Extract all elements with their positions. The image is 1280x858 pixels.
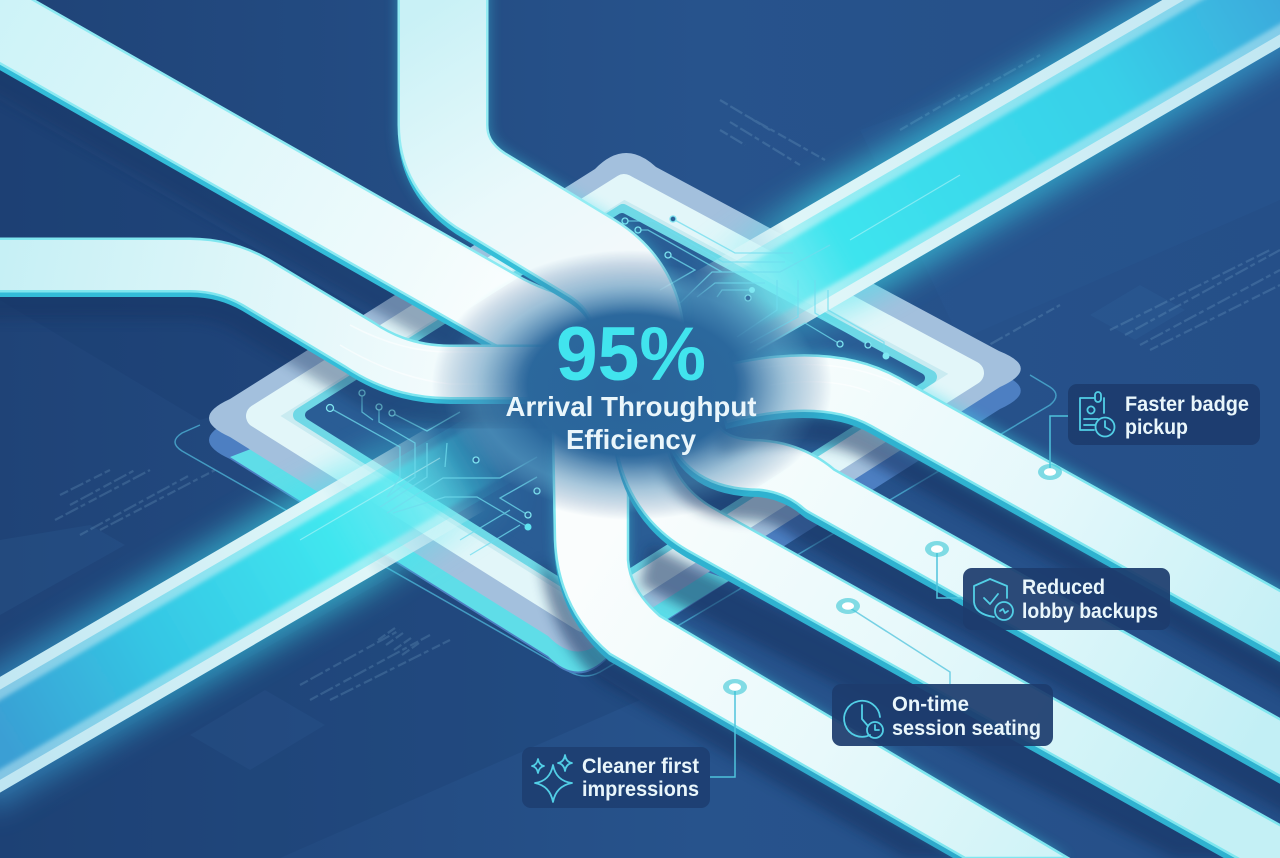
ribbon edge (640, 440, 1280, 858)
label box (1068, 384, 1260, 445)
arm highlight lines (300, 175, 960, 540)
label text: pickup (1125, 416, 1188, 439)
label box (963, 568, 1170, 630)
central hub glow (442, 263, 822, 513)
platform side (209, 175, 1021, 674)
ribbon: top left (0, 0, 610, 366)
ribbon face (553, 430, 1068, 858)
ribbon face (0, 0, 610, 340)
ribbon: left horizontal (0, 265, 560, 396)
ribbon side (689, 427, 1280, 777)
ribbon edge (720, 383, 1280, 645)
ribbon glow (443, 0, 640, 345)
ribbon shadow (640, 545, 1278, 858)
ribbon face (690, 420, 1280, 770)
ribbon side (0, 270, 560, 377)
ribbon: cleaner first impressions (540, 430, 1068, 858)
platform inner ring shade (300, 211, 930, 595)
ribbon shadow (0, 289, 556, 396)
connector (850, 608, 950, 684)
circuit traces (326, 216, 890, 555)
label text: Cleaner first (582, 755, 699, 778)
ribbon shadow (712, 415, 1280, 677)
marker (723, 679, 747, 695)
headline label: Efficiency (566, 424, 696, 455)
ribbon inner lines (760, 364, 900, 392)
ribbon shadow (540, 560, 1000, 858)
platform lower side cyan (230, 430, 730, 672)
ribbon glow (553, 430, 1068, 858)
label text: Reduced (1022, 576, 1105, 599)
label text: lobby backups (1022, 600, 1158, 623)
platform base (175, 153, 1056, 676)
ribbon face (640, 440, 1280, 858)
connector (710, 691, 735, 777)
connector (937, 553, 963, 598)
label text: On-time (892, 693, 969, 716)
connector (1050, 416, 1068, 468)
ribbon shadow (682, 450, 1280, 800)
platform dark centre (310, 218, 920, 589)
callout: faster badge pickup (1038, 384, 1260, 480)
ribbon face (443, 0, 640, 345)
ribbon side (719, 390, 1280, 652)
ribbon side (398, 136, 588, 318)
marker (1038, 464, 1062, 480)
ribbon face (720, 383, 1280, 645)
ribbon glow (720, 383, 1280, 645)
ribbon inner lines (340, 324, 420, 378)
marker (836, 598, 860, 614)
label text: session seating (892, 717, 1041, 740)
headline label: Arrival Throughput (506, 391, 756, 422)
ribbon: faster badge pickup (712, 364, 1280, 677)
ribbon edge (690, 420, 1280, 770)
marker (925, 541, 949, 557)
platform outline tray (175, 375, 1056, 676)
ribbon side (554, 546, 962, 858)
ribbon edge (443, 0, 640, 345)
circuit terminals (326, 216, 890, 530)
ribbon: top vertical (443, 0, 640, 351)
callout: cleaner first impressions (522, 679, 747, 808)
label box (522, 747, 710, 808)
ribbon side (0, 64, 492, 344)
platform outer glass (209, 153, 1021, 652)
callout: on-time session seating (832, 598, 1053, 746)
label box (832, 684, 1053, 746)
icon: badge with clock (1080, 392, 1114, 436)
ribbon side (639, 447, 1275, 858)
ribbon: reduced lobby backups (682, 420, 1280, 800)
callout: reduced lobby backups (925, 541, 1170, 630)
icon: clock (844, 701, 883, 738)
ribbon edge (0, 265, 560, 372)
ribbon edge (0, 0, 610, 340)
ribbon face (0, 265, 560, 372)
platform inner ring (258, 186, 972, 620)
label text: impressions (582, 778, 699, 801)
headline stat: 95%: 95% (556, 312, 706, 397)
icon: shield with check (974, 579, 1013, 620)
ribbon shadow (0, 70, 481, 344)
ribbon: on-time session seating (639, 440, 1280, 858)
icon: sparkles (532, 755, 572, 802)
label text: Faster badge (1125, 393, 1249, 416)
